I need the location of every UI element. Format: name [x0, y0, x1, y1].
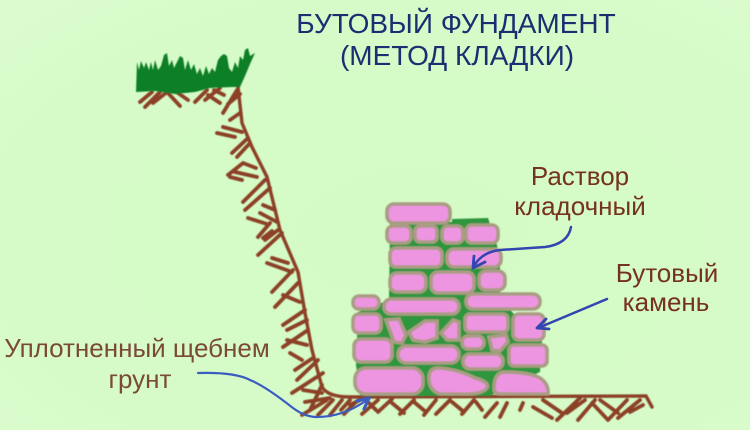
stones — [353, 204, 548, 394]
arrow: compacted ground — [198, 373, 369, 417]
label: compacted ground: Уплотненный щебнем — [4, 333, 270, 363]
arrow: rubble stone — [537, 299, 607, 329]
mortar — [356, 218, 542, 396]
grass — [136, 48, 255, 94]
label: rubble stone: камень — [623, 287, 709, 317]
label: mortar: кладочный — [514, 191, 646, 221]
arrow: mortar — [473, 227, 571, 268]
label: compacted ground: грунт — [109, 364, 172, 394]
label: rubble stone: Бутовый — [616, 258, 718, 288]
compacted base strip — [352, 394, 548, 398]
title: БУТОВЫЙ ФУНДАМЕНТ — [296, 8, 616, 39]
soil slope with hatching — [140, 87, 652, 420]
title: (МЕТОД КЛАДКИ) — [340, 40, 574, 71]
masonry foundation — [353, 204, 548, 396]
label: mortar: Раствор — [531, 161, 629, 191]
